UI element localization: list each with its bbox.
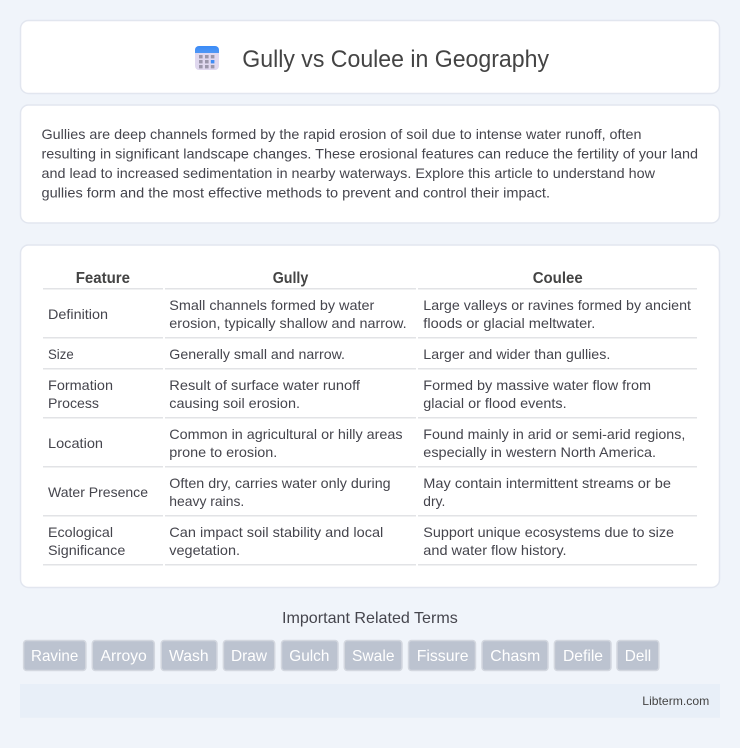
- tag: Arroyo: Arroyo: [100, 648, 147, 665]
- table row: water presence: dry.: [423, 493, 445, 509]
- text block: intro paragraph: Gullies are deep channels formed by the rapid erosion of soil due to intense water runoff, often: [42, 126, 642, 142]
- text block: intro paragraph: and lead to increased sedimentation in nearby waterways. Explore this article to understand how: [42, 165, 656, 181]
- panel: header: [20, 20, 720, 94]
- text block: intro paragraph: [42, 126, 698, 200]
- tag: Defile: Defile: [563, 648, 603, 665]
- tag: Defile: [554, 640, 611, 670]
- table row: formation process: glacial or flood events.: [423, 395, 567, 411]
- table row: location: Found mainly in arid or semi-arid regions,: [423, 426, 685, 442]
- tag: Wash: [161, 640, 217, 670]
- tag: Dell: [617, 640, 659, 670]
- footer source text: Libterm.com: [642, 694, 709, 708]
- table header row: Coulee: [533, 270, 583, 287]
- table row: water presence: heavy rains.: [169, 493, 244, 509]
- table row: definition: erosion, typically shallow and narrow.: [169, 315, 407, 331]
- table row: ecological significance: Significance: [48, 542, 126, 558]
- icon: calendar: [195, 46, 219, 70]
- table row: location: [43, 426, 697, 468]
- tag: Ravine: Ravine: [31, 648, 78, 665]
- panel: comparison table: [20, 245, 720, 588]
- tag: Chasm: Chasm: [490, 648, 540, 665]
- table row: definition: Definition: [48, 306, 108, 322]
- tag: Ravine: [24, 640, 86, 670]
- table row: location: especially in western North America.: [423, 444, 656, 460]
- table header row: [43, 270, 697, 290]
- tag: Draw: [223, 640, 275, 670]
- table header row: Feature: [76, 270, 130, 287]
- table row: size: Larger and wider than gullies.: [423, 346, 610, 362]
- table row: location: Location: [48, 435, 103, 451]
- table row: definition: Large valleys or ravines formed by ancient: [423, 297, 691, 313]
- table row: ecological significance: Support unique ecosystems due to size: [423, 524, 674, 540]
- heading: important related terms: Important Related Terms: [282, 610, 458, 627]
- tag: Gulch: Gulch: [289, 648, 329, 665]
- table row: ecological significance: [43, 524, 697, 566]
- table row: definition: Small channels formed by water: [169, 297, 375, 313]
- tag: Chasm: [482, 640, 548, 670]
- table row: water presence: May contain intermittent streams or be: [423, 475, 671, 491]
- table row: formation process: Result of surface water runoff: [169, 377, 360, 393]
- table row: water presence: [43, 475, 697, 516]
- tag: Wash: Wash: [169, 648, 209, 665]
- related term tags: [24, 640, 659, 670]
- table row: formation process: [43, 377, 697, 418]
- table row: definition: floods or glacial meltwater.: [423, 315, 595, 331]
- table row: ecological significance: Can impact soil stability and local: [169, 524, 383, 540]
- table row: formation process: Formation: [48, 377, 113, 393]
- tag: Swale: [344, 640, 402, 670]
- tag: Fissure: [408, 640, 476, 670]
- tag: Dell: Dell: [625, 648, 651, 665]
- footer bar: [20, 684, 720, 718]
- text block: intro paragraph: resulting in significant landscape changes. These erosional features can reduce the fertility of your land: [42, 146, 698, 162]
- table row: formation process: Process: [48, 395, 99, 411]
- table row: water presence: Often dry, carries water only during: [169, 475, 391, 491]
- table row: formation process: Formed by massive water flow from: [423, 377, 651, 393]
- title: Gully vs Coulee in Geography: [242, 46, 549, 73]
- tag: Swale: Swale: [352, 648, 395, 665]
- text block: intro paragraph: gullies form and the most effective methods to prevent and control their impact.: [42, 184, 550, 200]
- panel: intro text: [20, 105, 720, 223]
- tag: Arroyo: [92, 640, 154, 670]
- table row: ecological significance: Ecological: [48, 524, 113, 540]
- table row: size: [43, 346, 697, 370]
- table row: definition: [43, 297, 697, 338]
- table header row: Gully: [273, 270, 308, 287]
- table row: ecological significance: and water flow history.: [423, 542, 567, 558]
- table row: size: Generally small and narrow.: [169, 346, 345, 362]
- table row: location: prone to erosion.: [169, 444, 277, 460]
- table row: location: Common in agricultural or hilly areas: [169, 426, 403, 442]
- table row: water presence: Water Presence: [48, 484, 148, 500]
- table row: size: Size: [48, 346, 74, 362]
- table row: formation process: causing soil erosion.: [169, 395, 300, 411]
- tag: Gulch: [282, 640, 338, 670]
- tag: Fissure: Fissure: [417, 648, 469, 665]
- tag: Draw: Draw: [231, 648, 267, 665]
- table row: ecological significance: vegetation.: [169, 542, 240, 558]
